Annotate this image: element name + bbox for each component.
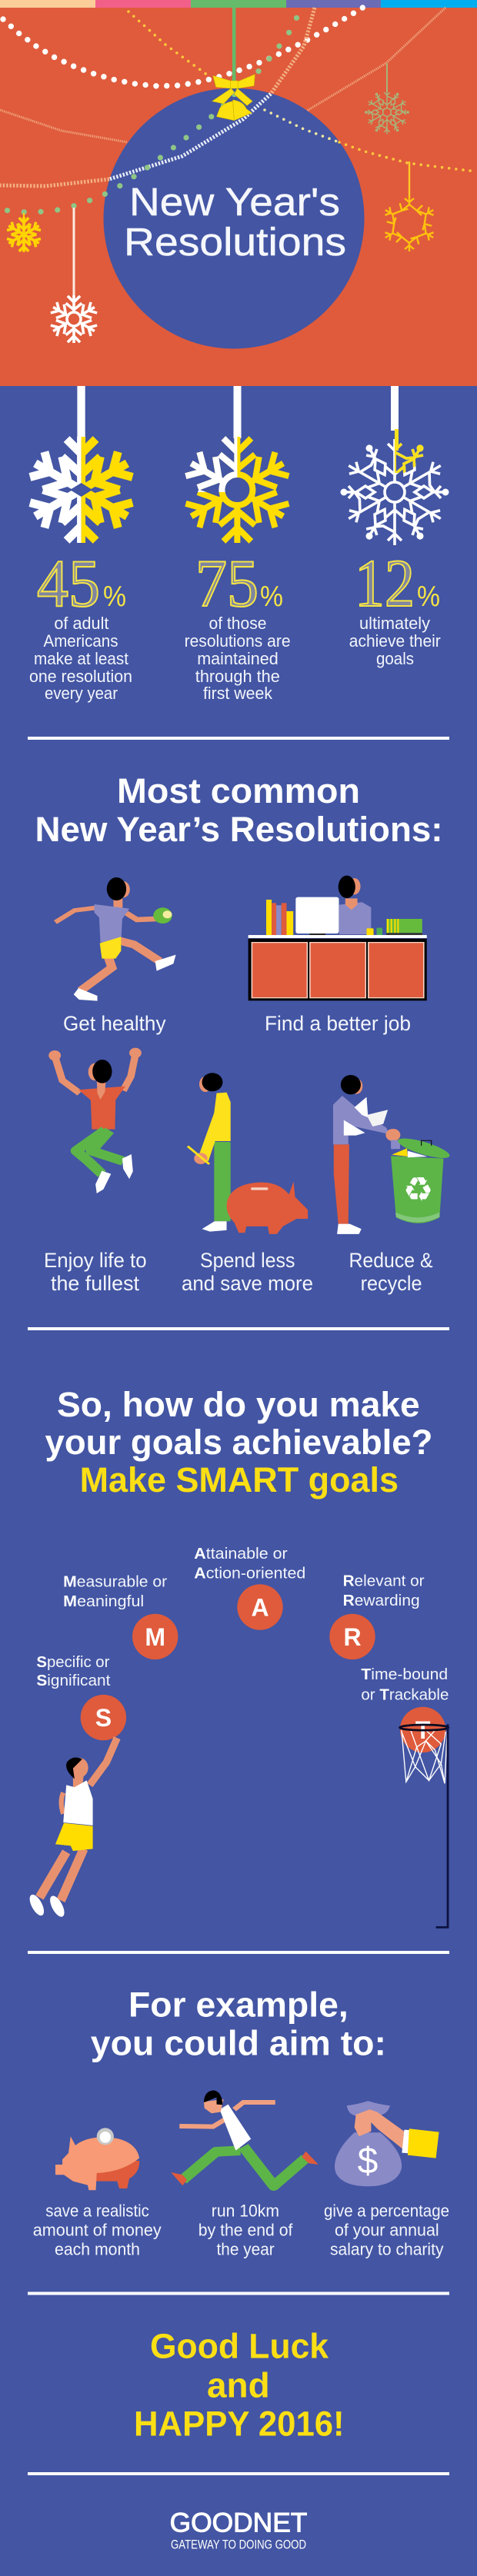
closing message: Good Luck <box>150 2327 329 2366</box>
logo: goodnet <box>170 2508 307 2551</box>
number 12%: % <box>417 581 440 613</box>
heading: for example <box>91 1985 386 2063</box>
green bead garland <box>5 15 299 215</box>
number 45%: 45 <box>37 547 100 621</box>
label: specific <box>36 1653 111 1689</box>
label: relevant: Relevant or <box>343 1572 425 1589</box>
top colour stripe <box>0 0 477 8</box>
description <box>185 614 291 703</box>
white bead garland <box>3 8 362 86</box>
description: resolutions are <box>185 631 291 651</box>
letter ball: R: R <box>343 1623 362 1651</box>
icon: dollar sign: $ <box>358 2141 378 2182</box>
letter ball: T <box>400 1707 445 1752</box>
heading: smart goals: your goals achievable? <box>45 1423 432 1462</box>
label: attainable: Action-oriented <box>194 1564 305 1583</box>
caption: run 10km: run 10km <box>212 2202 279 2221</box>
caption: save money: each month <box>55 2240 140 2259</box>
caption: get healthy: Get healthy <box>63 1012 166 1035</box>
title <box>124 180 346 264</box>
figure: desk worker <box>249 876 427 1000</box>
description <box>29 614 132 703</box>
letter ball: A <box>237 1584 283 1630</box>
description: of adult <box>54 614 108 633</box>
caption: save money: amount of money <box>33 2221 162 2240</box>
heading: for example: For example, <box>128 1985 349 2025</box>
caption: save money: save a realistic <box>45 2202 149 2221</box>
caption: enjoy life: Enjoy life to <box>44 1249 147 1272</box>
figure: basketball hoop <box>400 1724 449 1927</box>
stat: 12 percent <box>340 386 449 667</box>
icon: recycle symbol: ♻ <box>403 1170 433 1210</box>
caption: reduce and recycle <box>349 1249 432 1295</box>
label: attainable: Attainable or <box>194 1545 288 1563</box>
stat: 45 percent <box>25 386 137 703</box>
description: through the <box>195 667 280 686</box>
figure: runner with apple <box>55 877 176 1001</box>
description: Americans <box>43 631 118 651</box>
caption: give to charity: of your annual <box>335 2221 439 2240</box>
heading: for example: you could aim to: <box>91 2024 386 2063</box>
closing message <box>134 2327 345 2443</box>
caption: spend less: and save more <box>182 1272 313 1295</box>
caption: run 10km: by the end of <box>198 2221 293 2240</box>
letter ball: M: M <box>145 1623 165 1651</box>
caption: give to charity: give a percentage <box>324 2202 449 2221</box>
letter ball: R <box>329 1614 375 1659</box>
label: measurable <box>63 1573 167 1610</box>
icon: yellow outline snowflake ornament <box>377 161 442 252</box>
label: specific: Specific or <box>36 1653 110 1671</box>
label: specific: Significant <box>36 1672 111 1689</box>
caption: give to charity <box>324 2202 449 2259</box>
caption: spend less <box>182 1249 313 1295</box>
heading: most common resolutions: Most common <box>117 771 360 810</box>
label: relevant: Rewarding <box>343 1592 420 1609</box>
figure: saver with piggy bank <box>188 1073 308 1234</box>
closing message: HAPPY 2016! <box>134 2404 345 2443</box>
figure: jumping person <box>48 1048 142 1193</box>
heading: smart goals <box>45 1385 432 1499</box>
letter ball: M <box>132 1614 178 1659</box>
caption: reduce and recycle: Reduce & <box>349 1249 432 1272</box>
caption: enjoy life <box>44 1249 147 1295</box>
icon: bow and bells <box>212 75 255 121</box>
icon: white outline snowflake <box>340 386 449 545</box>
number 45%: % <box>103 581 126 613</box>
icon: tan snowflake ornament <box>362 63 412 135</box>
label: relevant <box>343 1572 425 1609</box>
figure: basketball player <box>27 1738 117 1919</box>
description: ultimately <box>359 614 430 633</box>
label: time-bound: Time-bound <box>361 1666 448 1683</box>
stat: 75 percent <box>182 386 292 703</box>
description: one resolution <box>29 667 132 686</box>
heading: smart goals: So, how do you make <box>57 1385 420 1424</box>
icon: half yellow snowflake <box>25 386 137 543</box>
description: first week <box>203 684 273 703</box>
title: New Year's <box>129 180 340 224</box>
letter ball: T: T <box>415 1716 431 1744</box>
figure: person recycling <box>333 1075 452 1234</box>
label: time-bound: or Trackable <box>361 1686 449 1704</box>
caption: enjoy life: the fullest <box>51 1272 139 1295</box>
closing message: and <box>207 2365 270 2405</box>
heading: most common resolutions <box>35 771 443 849</box>
number 12%: 12 <box>355 547 415 621</box>
caption: run 10km <box>198 2202 293 2259</box>
label: measurable: Measurable or <box>63 1573 167 1590</box>
icon: white snowflake ornament <box>49 208 98 343</box>
icon: small yellow snowflake ornament <box>5 213 42 252</box>
heading: most common resolutions: New Year’s Resolutions: <box>35 810 443 849</box>
header panel <box>0 0 477 386</box>
title: Resolutions <box>124 220 346 264</box>
description <box>349 614 441 668</box>
description: achieve their <box>349 631 441 651</box>
letter ball: A: A <box>251 1593 269 1621</box>
description: of those <box>209 614 266 633</box>
logo: goodnet: GATEWAY TO DOING GOOD <box>171 2538 306 2551</box>
icon: mostly yellow snowflake <box>182 386 292 543</box>
caption: save money <box>33 2202 162 2259</box>
logo: goodnet: GOODNET <box>170 2508 307 2538</box>
caption: give to charity: salary to charity <box>330 2240 443 2259</box>
label: measurable: Meaningful <box>63 1593 144 1610</box>
heading: smart goals: Make SMART goals <box>80 1460 399 1499</box>
letter ball: S: S <box>95 1704 112 1732</box>
number 75%: % <box>260 581 283 613</box>
description: every year <box>45 684 118 703</box>
figure: piggy bank with coin <box>55 2128 139 2190</box>
yellow dotted garland <box>128 12 476 171</box>
description: goals <box>376 649 414 668</box>
description: maintained <box>197 649 279 668</box>
diamond chain garlands <box>0 8 445 186</box>
caption: run 10km: the year <box>217 2240 275 2259</box>
number 75%: 75 <box>195 547 259 621</box>
caption: spend less: Spend less <box>200 1249 295 1272</box>
label: attainable <box>194 1545 305 1583</box>
description: make at least <box>34 649 128 668</box>
figure: money bag in hand <box>335 2101 439 2186</box>
caption: find a better job: Find a better job <box>265 1012 411 1035</box>
green ball string <box>232 8 235 81</box>
caption: reduce and recycle: recycle <box>361 1272 422 1295</box>
figure: leaping runner <box>171 2090 319 2186</box>
label: time-bound <box>361 1666 449 1704</box>
ornament ball <box>103 88 365 349</box>
letter ball: S <box>81 1695 126 1740</box>
